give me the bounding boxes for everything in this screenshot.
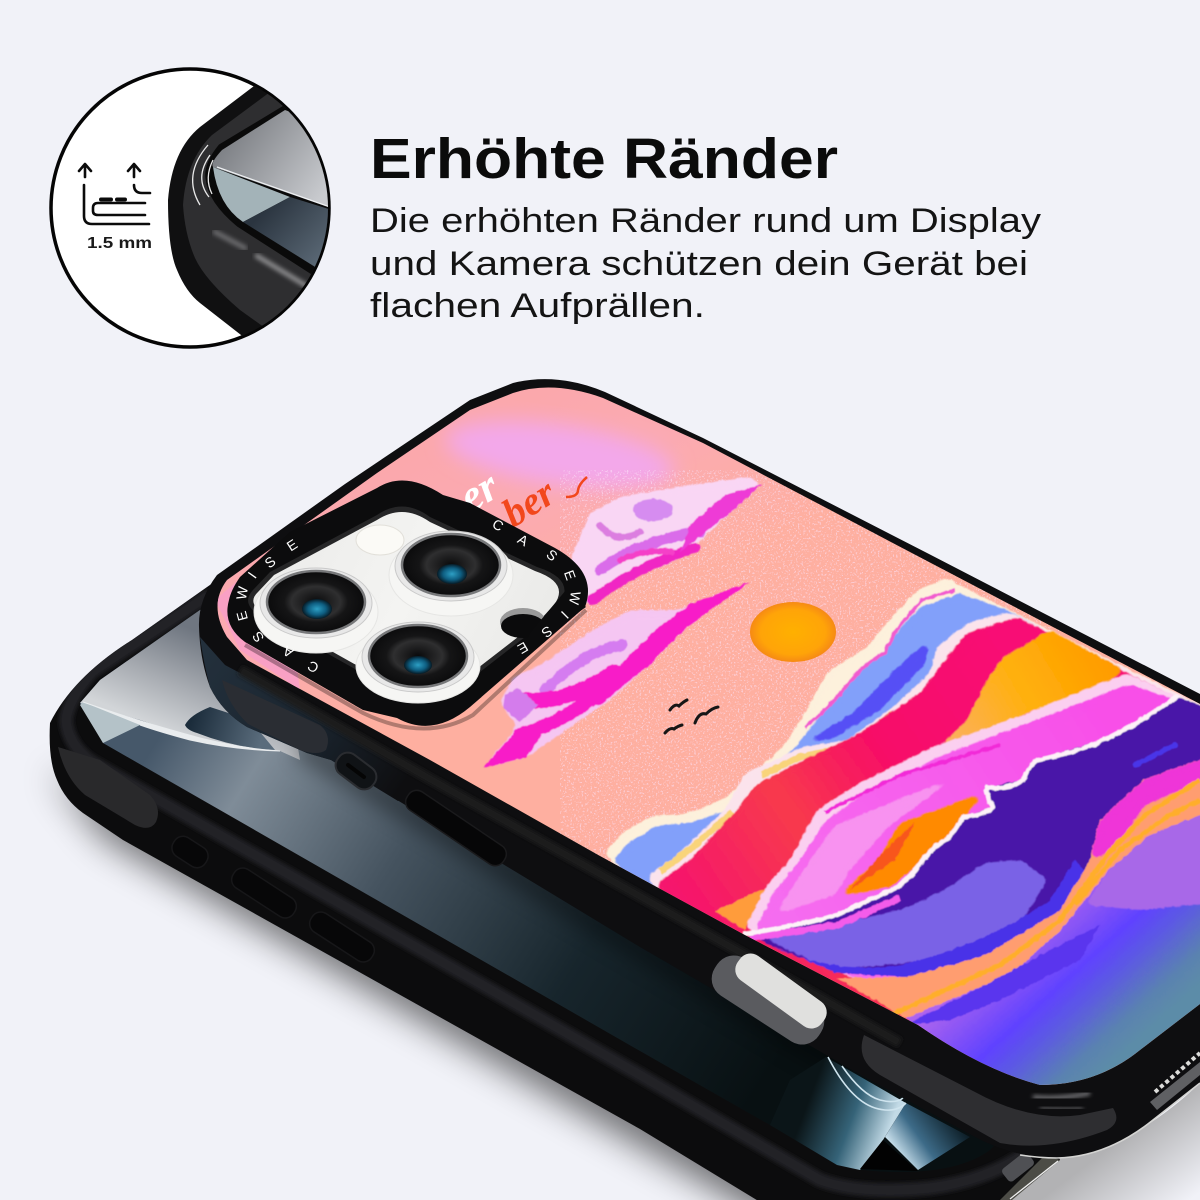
sun <box>750 602 836 662</box>
brand lettering CASEWISE: S <box>539 623 555 641</box>
artwork: sunset mountains <box>218 388 1200 1085</box>
back phone white edge line <box>1010 1161 1058 1199</box>
back phone screen <box>80 520 1020 1172</box>
cloud upper <box>570 477 762 607</box>
lower magenta band <box>1090 758 1200 858</box>
red band <box>657 617 1162 1021</box>
brand lettering CASEWISE: A <box>515 531 532 550</box>
front phone shell <box>199 379 1200 1158</box>
screen blue glow lower <box>770 1057 906 1170</box>
art painted layers <box>483 477 1200 1140</box>
label: 1.5 mm: 1.5 mm <box>87 235 152 252</box>
gold hills <box>943 630 1122 744</box>
cloud lower <box>483 582 750 768</box>
bumper right overlay over lidar <box>522 590 586 652</box>
inset phone corner <box>168 86 328 336</box>
lens top <box>395 531 507 601</box>
art speckle texture <box>560 470 1060 890</box>
birds <box>665 700 718 733</box>
front phone left side panel <box>200 637 420 801</box>
orange hill <box>844 795 980 896</box>
lidar sensor <box>500 608 546 638</box>
brand lettering CASEWISE: W <box>233 584 251 601</box>
brand lettering CASEWISE: W <box>566 590 584 607</box>
front side carbon patch <box>222 680 328 753</box>
speaker grille <box>1155 1053 1200 1092</box>
power button chrome <box>730 948 832 1034</box>
lens ring halos <box>254 534 513 703</box>
brand lettering CASEWISE: E <box>284 536 300 554</box>
left corner carbon patch <box>58 747 158 828</box>
screen black triangle <box>860 1140 918 1171</box>
back phone port <box>1000 1151 1036 1183</box>
art lilac haze <box>442 409 678 501</box>
lower orange strip <box>715 888 765 930</box>
art left pink sliver <box>218 582 300 689</box>
lower orange lines <box>891 780 1200 1015</box>
violet top of sky <box>1088 815 1200 911</box>
drop shadow under phones <box>50 770 1200 1200</box>
brand lettering CASEWISE: S <box>249 629 267 645</box>
far ridge cream <box>606 578 1200 868</box>
camera bumper ring <box>227 480 588 726</box>
brand lettering CASEWISE: E <box>561 568 579 582</box>
screen blue glow right <box>885 1103 970 1170</box>
screen white curve <box>83 702 280 751</box>
purple light patch <box>761 860 1048 970</box>
camera glass <box>253 512 559 696</box>
back phone <box>50 584 1060 1200</box>
brand lettering CASEWISE: E <box>233 609 251 623</box>
magenta hills <box>756 684 1171 979</box>
far ridge periwinkle <box>614 592 1036 886</box>
purple mountain <box>745 697 1200 977</box>
action button <box>402 786 510 870</box>
body text: Die erhöhten Ränder rund um Display <box>370 202 1041 240</box>
far ridge pink stroke <box>805 590 955 728</box>
back phone volume up <box>228 864 300 922</box>
lens bottom <box>362 622 474 692</box>
magenta lilac lobe <box>780 784 944 912</box>
icon: raised edge diagram <box>79 164 150 224</box>
front phone <box>199 370 1200 1158</box>
front corner carbon patch <box>862 1035 1116 1146</box>
screen slate notch <box>185 707 275 750</box>
white ridge line <box>745 697 1177 934</box>
brand lettering CASEWISE: E <box>515 639 531 657</box>
power button housing <box>704 948 832 1052</box>
flash <box>356 525 404 555</box>
brand lettering CASEWISE: C <box>305 658 321 676</box>
back phone rim highlight <box>66 597 1030 1190</box>
magenta ridge underline <box>750 898 900 938</box>
shadow from front phone on screen <box>300 745 850 1070</box>
brand lettering CASEWISE: C <box>490 516 506 534</box>
screen top wedge <box>80 610 300 760</box>
body text: und Kamera schützen dein Gerät bei <box>370 245 1028 283</box>
camera inner lip <box>248 506 565 702</box>
front corner highlight upper <box>1033 1093 1090 1098</box>
brand lettering CASEWISE: I <box>244 569 260 581</box>
purple blue underside <box>770 860 1085 977</box>
back phone lower right translucent edge <box>1000 1155 1060 1200</box>
lower salmon band <box>836 760 1200 1018</box>
heading: Erhöhte Ränder <box>370 127 838 191</box>
back phone body <box>50 458 1060 1200</box>
screen light curves <box>828 1057 906 1110</box>
blue strokes over sky <box>905 925 1100 1025</box>
front phone rim sheen <box>240 670 900 1043</box>
brand lettering CASEWISE: S <box>543 546 561 564</box>
body text: flachen Aufprällen. <box>370 287 705 325</box>
brand lettering CASEWISE: S <box>261 553 279 571</box>
orange script tail <box>566 477 587 497</box>
brand lettering CASEWISE <box>233 516 584 676</box>
lower sky <box>906 815 1200 1085</box>
magenta strokes <box>825 745 1000 812</box>
purple blue streak <box>1135 745 1175 765</box>
brand lettering CASEWISE: A <box>279 642 296 661</box>
far ridge deep blue <box>813 645 929 742</box>
silent switch <box>331 748 381 794</box>
red band cream edge <box>649 612 1200 888</box>
camera island <box>227 480 588 729</box>
art base <box>200 370 1200 1100</box>
speaker translucent strip <box>1150 1062 1200 1110</box>
brand lettering CASEWISE: I <box>558 608 572 622</box>
body text <box>370 202 1041 325</box>
screen pale wedge <box>80 702 140 743</box>
ridge yellow strips <box>660 714 893 872</box>
front bottom white edge <box>1020 1083 1200 1158</box>
camera bumper drop shadow <box>245 610 586 729</box>
partial artwork lettering orange: ber <box>494 469 563 536</box>
back phone side button small <box>168 832 212 872</box>
inset circle: raised edge detail <box>51 69 340 347</box>
partial artwork lettering white: er <box>450 460 508 522</box>
lens left <box>260 568 372 638</box>
back phone volume down <box>306 908 378 966</box>
magenta hills cream edge <box>746 673 1174 978</box>
front corner highlight lower <box>1040 1107 1083 1109</box>
